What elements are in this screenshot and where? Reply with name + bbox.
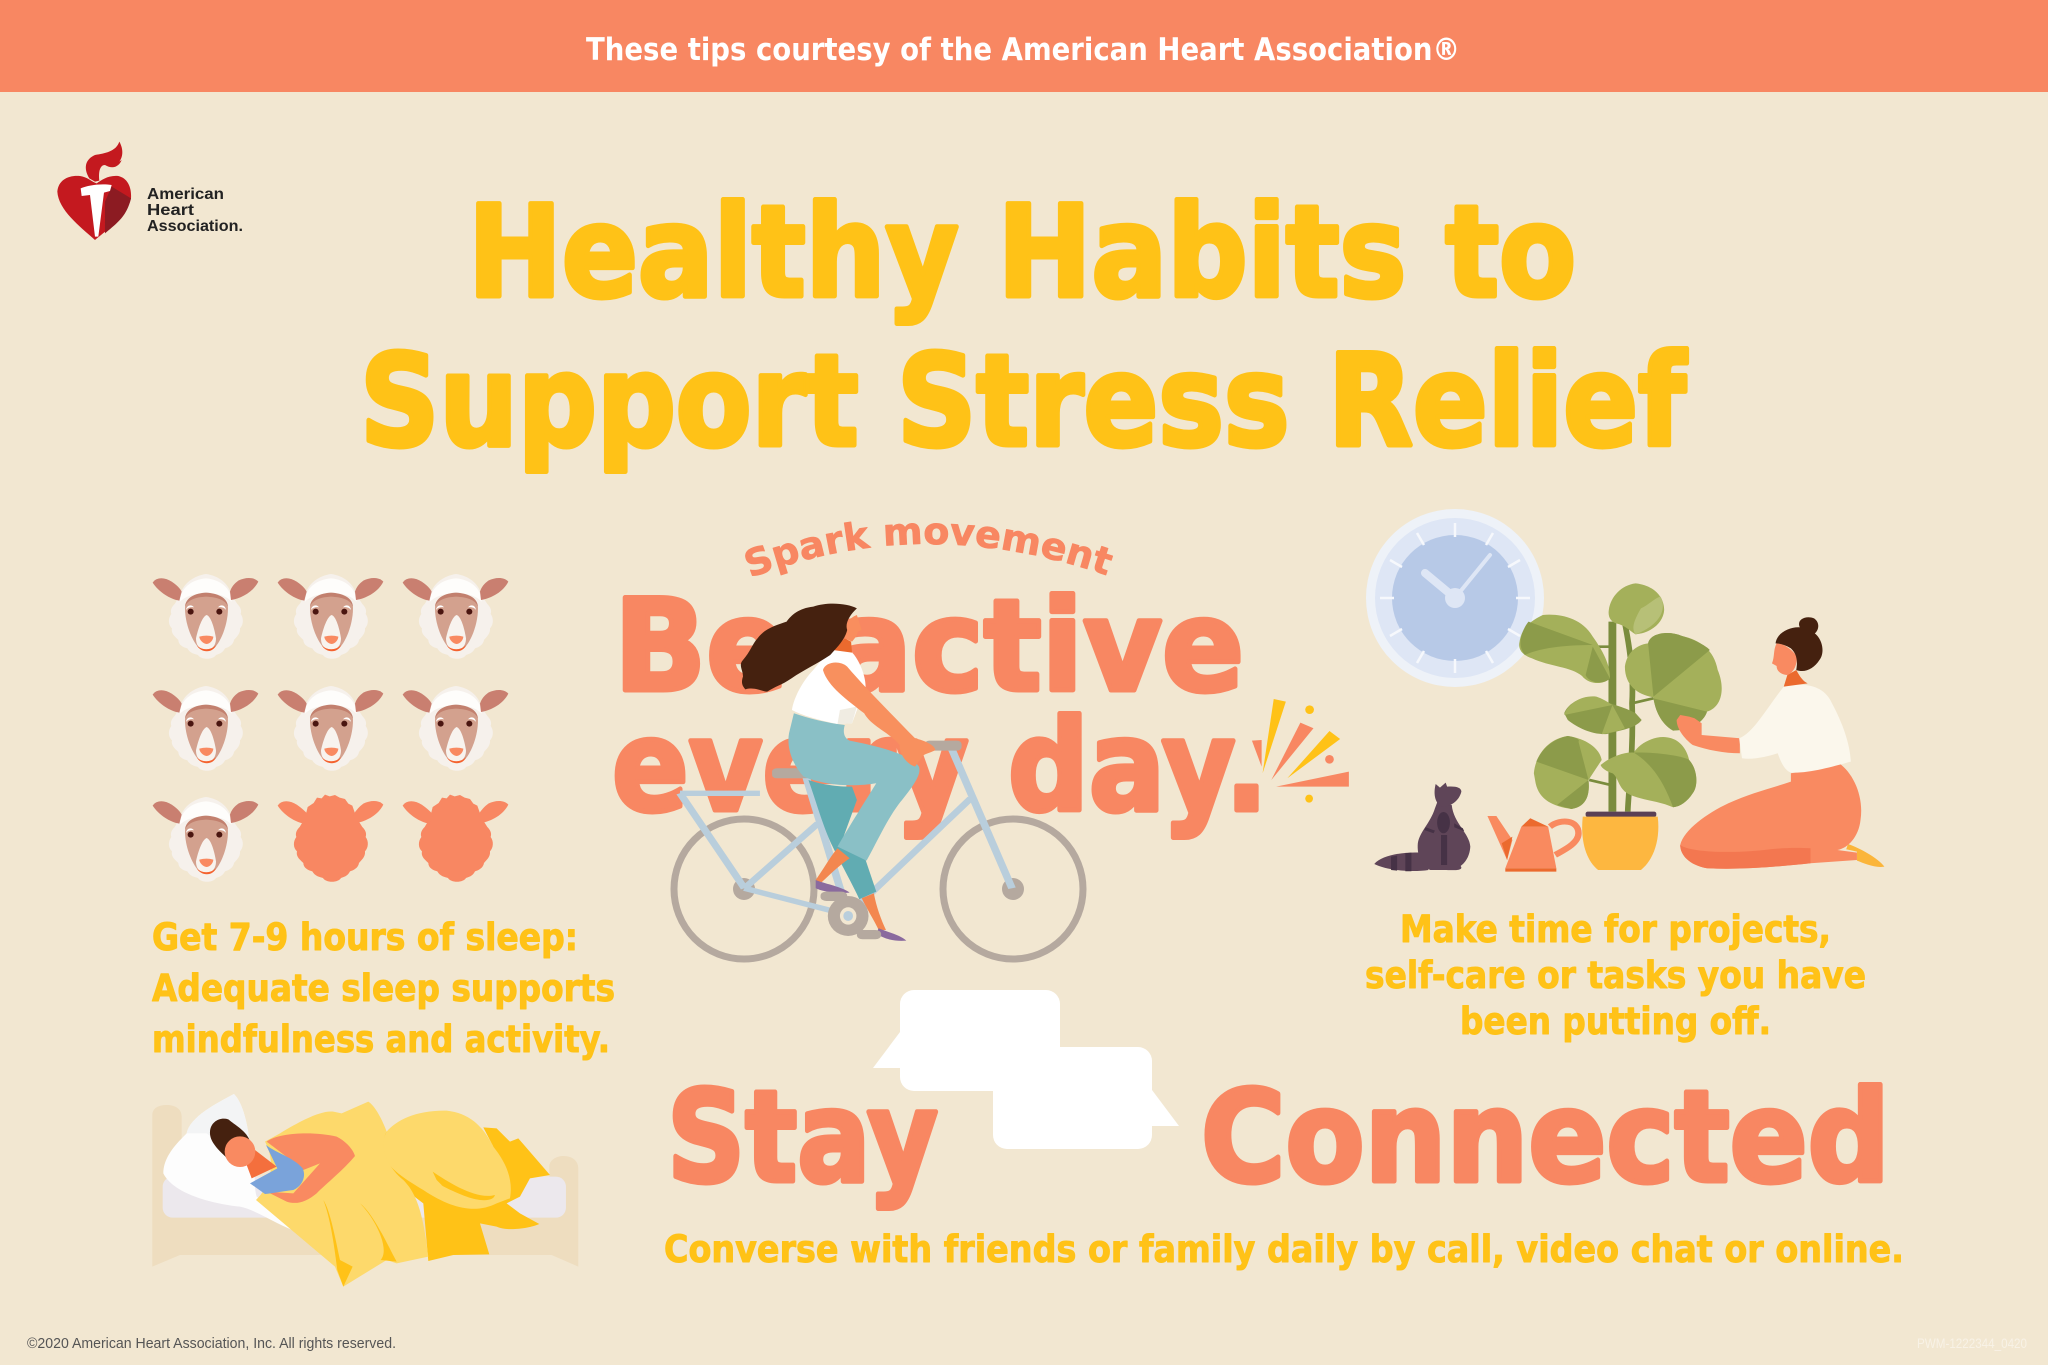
logo: American Heart Association: Association. <box>147 218 243 235</box>
headline: Be active every day: Be active <box>614 572 1244 720</box>
sleep tip text: mindfulness and activity. <box>152 1018 610 1061</box>
illustration: wall clock <box>1366 509 1544 687</box>
flower pot <box>1582 812 1658 870</box>
sleep tip text <box>152 916 615 1061</box>
time tip text: been putting off. <box>1460 1000 1771 1043</box>
illustration: woman sleeping in bed <box>152 1094 578 1287</box>
logo: American Heart Association <box>57 142 243 240</box>
logo: American Heart Association: Heart <box>147 202 195 219</box>
sheep grid <box>153 574 508 882</box>
curved subheading: Spark movement: Spark movement <box>745 522 1113 576</box>
kneeling woman <box>1677 617 1884 869</box>
sleep tip text: Adequate sleep supports <box>152 967 615 1010</box>
headline: Stay Connected: Connected <box>1201 1063 1890 1211</box>
rider and frame <box>680 604 1012 941</box>
headline: Stay Connected <box>667 1063 1890 1211</box>
watering can <box>1487 816 1578 872</box>
icon: speech bubbles <box>873 990 1179 1149</box>
bicycle wheels <box>674 819 1083 959</box>
sheep row 2 <box>153 686 508 771</box>
headline: Be active every day: every day. <box>612 692 1268 840</box>
illustration: potted plant, cat, watering can and woman <box>1374 583 1884 872</box>
title: Healthy Habits to <box>468 178 1576 326</box>
sheep row 1 <box>153 574 508 659</box>
icon: burst beside headline <box>1252 699 1349 803</box>
title: Support Stress Relief <box>360 327 1688 475</box>
time tip text: Make time for projects, <box>1400 908 1831 951</box>
sheep row 3 with two silhouettes <box>153 795 508 882</box>
connection tip text: Converse with friends or family daily by call, video chat or online. <box>664 1228 1904 1271</box>
illustration: woman riding bicycle <box>674 604 1083 959</box>
sleep tip text: Get 7-9 hours of sleep: <box>152 916 578 959</box>
time tip text: self-care or tasks you have <box>1365 954 1866 997</box>
top banner: These tips courtesy of the American Heart Association® <box>586 32 1460 68</box>
title <box>360 178 1688 475</box>
top banner <box>0 0 2048 92</box>
time tip text <box>1365 908 1866 1043</box>
document code: PWM-1222344_0420 <box>1917 1336 2027 1351</box>
headline: Stay Connected: Stay <box>667 1063 938 1211</box>
plant <box>1519 583 1722 812</box>
curved subheading: Spark movement <box>745 522 1113 576</box>
copyright footer: ©2020 American Heart Association, Inc. All rights reserved. <box>27 1336 396 1352</box>
logo: American Heart Association: American <box>147 186 224 203</box>
cat <box>1374 783 1470 871</box>
headline: Be active every day <box>612 572 1268 840</box>
